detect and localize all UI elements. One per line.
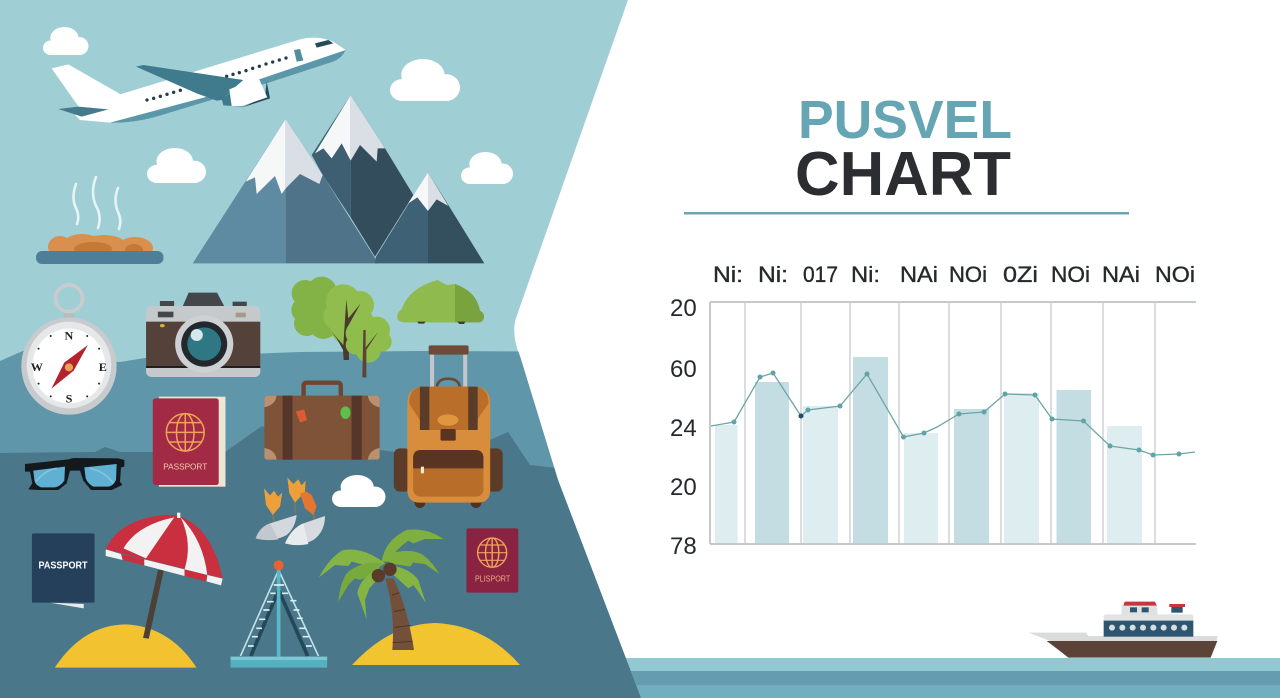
icon: cloud top right <box>390 59 460 101</box>
icon: small cloud <box>332 475 386 507</box>
icon: airplane <box>52 38 346 123</box>
icon: bush <box>397 280 484 324</box>
icon: tulips and shells <box>256 477 325 545</box>
x-axis labels: NAi <box>900 262 938 287</box>
x-axis labels <box>713 262 1195 287</box>
icon: eyeglasses <box>25 458 124 490</box>
icon: compass <box>21 285 117 415</box>
trend line <box>711 370 1195 458</box>
icon: cloud middle <box>147 148 206 183</box>
icon: steaming food plate <box>36 177 164 264</box>
x-axis labels: 0Zi <box>1003 262 1038 287</box>
x-axis labels: Ni: <box>851 262 880 287</box>
icon: navy passport: PASSPORT <box>39 560 88 571</box>
icon: beach umbrella on sand <box>55 513 223 668</box>
chart: bars and line <box>670 262 1196 560</box>
icon: compass: N <box>65 328 74 342</box>
icon: suitcase <box>264 383 380 460</box>
x-axis labels: Ni: <box>713 262 743 287</box>
icon: tower <box>231 560 327 668</box>
bars <box>715 357 1142 544</box>
y-axis labels <box>670 295 697 560</box>
x-axis labels: NAi <box>1102 262 1140 287</box>
y-axis labels: 20 <box>670 295 697 322</box>
icon: ship <box>1028 602 1218 658</box>
panel: travel background <box>0 0 660 698</box>
icon: compass: W <box>31 360 43 374</box>
x-axis labels: NOi <box>949 262 987 287</box>
x-axis labels: NOi <box>1051 262 1090 287</box>
icon: red passport: PASSPORT <box>163 461 208 471</box>
icon: mountains <box>193 95 484 263</box>
x-axis labels: 017 <box>803 262 838 287</box>
y-axis labels: 24 <box>670 415 697 442</box>
x-axis labels: Ni: <box>758 262 788 287</box>
y-axis labels: 78 <box>670 533 697 560</box>
x-axis labels: NOi <box>1155 262 1195 287</box>
icon: maroon passport <box>466 528 518 593</box>
sea bands <box>600 658 1280 698</box>
title <box>795 90 1012 209</box>
sand mound <box>352 623 520 665</box>
icon: trees <box>291 277 392 377</box>
icon: navy passport <box>32 533 95 608</box>
icon: palm tree on sand <box>319 530 520 665</box>
title: CHART <box>795 140 1011 209</box>
icon: cloud right <box>461 152 513 184</box>
icon: camera <box>146 293 260 377</box>
y-axis labels: 20 <box>670 474 697 501</box>
icon: cloud top left <box>43 27 88 55</box>
y-axis labels: 60 <box>670 356 697 383</box>
icon: maroon passport: PLISPORT <box>475 574 511 583</box>
icon: backpack with trolley <box>394 345 503 508</box>
icon: red passport <box>153 397 225 487</box>
icon: compass: E <box>99 360 107 374</box>
title: PUSVEL <box>798 90 1012 150</box>
icon: compass: S <box>66 392 73 406</box>
